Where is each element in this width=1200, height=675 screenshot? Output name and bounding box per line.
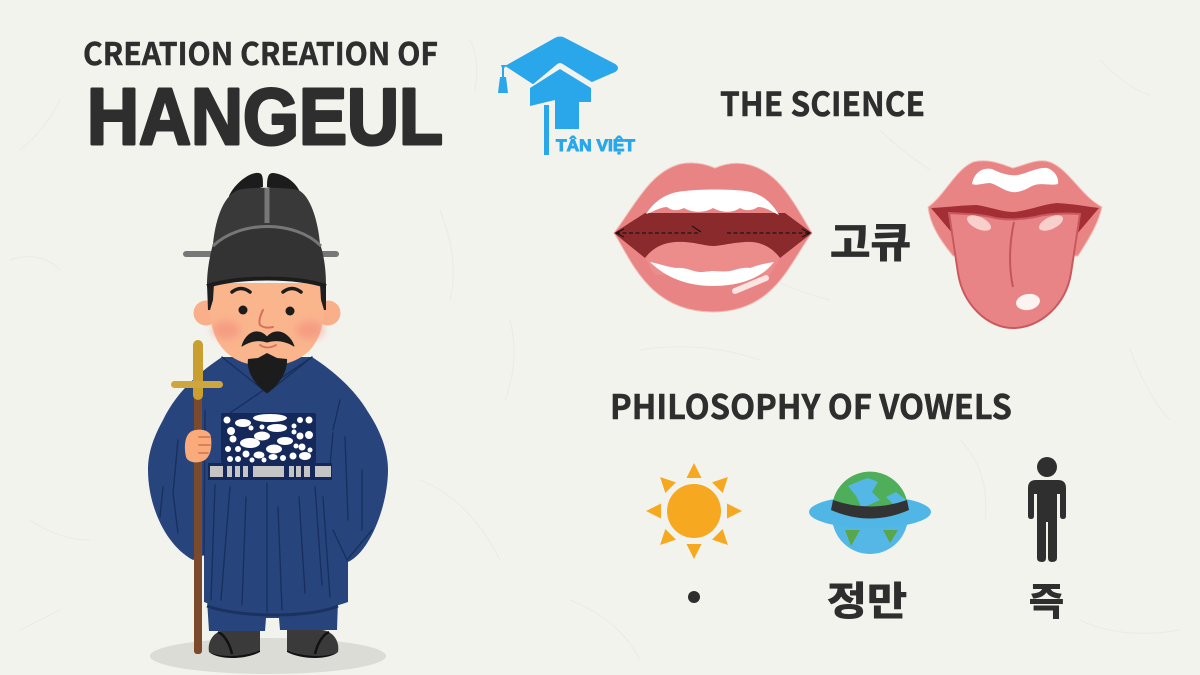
face: [209, 283, 325, 366]
illustration: open mouth: [614, 163, 812, 312]
heading: The Science: THE SCIENCE: [720, 78, 925, 126]
heading: Philosophy of Vowels: PHILOSOPHY OF VOWELS: [610, 380, 1012, 429]
label: dot: [688, 591, 700, 603]
ears: [194, 300, 340, 326]
icon: person: [1028, 457, 1066, 562]
chest badge: [221, 413, 316, 463]
logo text: TÂN VIỆT: [556, 136, 636, 155]
robe fold lines: [160, 357, 372, 612]
hand: [185, 430, 211, 462]
robe: [148, 357, 388, 612]
title: [83, 29, 443, 161]
hat: [183, 173, 339, 310]
illustration: tongue out: [928, 161, 1102, 328]
icon: sun: [646, 463, 742, 559]
illustration: King Sejong: [148, 173, 388, 674]
belt: [208, 463, 332, 480]
title line: Creation Creation Of: CREATION CREATION OF: [83, 29, 438, 74]
title line: Hangeul: HANGEUL: [87, 72, 443, 161]
label: jeongman: 정만: [827, 571, 907, 627]
staff: [194, 395, 202, 654]
label: gogyu: 고큐: [830, 209, 911, 269]
facial features: [232, 288, 301, 393]
label: jeuk: 즉: [1029, 571, 1064, 626]
logo: Tan Viet graduation cap: [498, 38, 636, 155]
icon: earth with ring: [809, 472, 931, 554]
shoes: [209, 630, 338, 658]
cheeks: [212, 321, 324, 339]
ground shadow: [150, 638, 386, 674]
trousers: [207, 600, 338, 631]
